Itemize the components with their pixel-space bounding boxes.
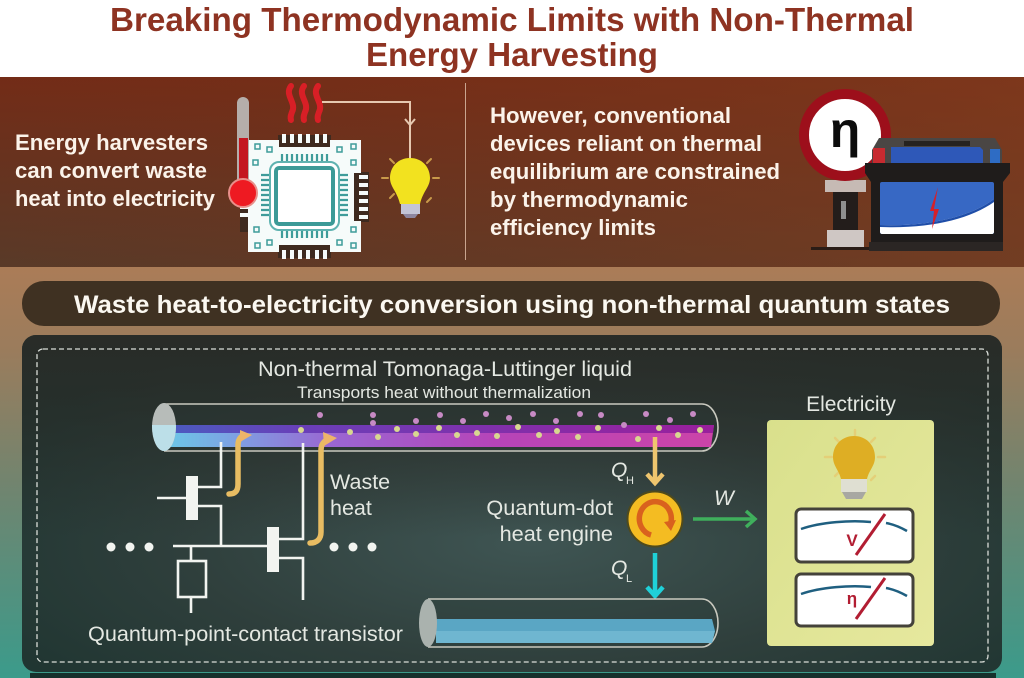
electricity output: Electricity	[806, 393, 896, 416]
text: thermodynamic limits: efficiency limits	[490, 215, 656, 240]
quantum-dot heat engine: Quantum-dot	[486, 495, 613, 520]
icon: output bulb	[825, 430, 885, 499]
text: waste heat: Waste	[330, 470, 390, 494]
text: thermodynamic limits: However, conventional	[490, 103, 731, 128]
text: thermodynamic limits: equilibrium are constrained	[490, 159, 780, 184]
arrow: QH: H	[626, 475, 634, 487]
hot liquid tube	[152, 403, 718, 451]
arrow: W	[693, 487, 755, 527]
icon: efficiency sign: η	[830, 102, 860, 158]
voltage meter	[796, 509, 913, 562]
arrow: W: W	[714, 487, 736, 510]
title	[110, 1, 914, 73]
text: thermodynamic limits: devices reliant on thermal	[490, 131, 762, 156]
icon: car battery	[865, 138, 1010, 251]
quantum-dot heat engine	[486, 492, 682, 546]
efficiency meter: η	[847, 589, 857, 608]
cold liquid tube	[419, 599, 718, 647]
voltage meter: V	[846, 531, 858, 550]
icon: efficiency sign	[804, 94, 886, 250]
panel: non-thermal quantum conversion	[22, 335, 1002, 672]
icon: heat waves	[289, 86, 320, 120]
arrow: QL: Q	[611, 557, 627, 580]
icon: light bulb	[382, 158, 439, 218]
title: Breaking Thermodynamic Limits with Non-Thermal	[110, 1, 914, 38]
icon: microchip	[240, 134, 369, 259]
text: quantum-point-contact transistor: Quantum-point-contact transistor	[88, 622, 403, 646]
panel: conventional harvesters banner	[0, 77, 1024, 267]
arrow: QL	[611, 553, 663, 596]
text: liquid heading: Non-thermal Tomonaga-Luttinger liquid	[258, 357, 632, 381]
heading pill: Waste heat-to-electricity conversion using non-thermal quantum states	[74, 291, 950, 319]
text: energy harvesters	[15, 130, 216, 211]
heading pill	[22, 281, 1000, 326]
quantum-dot heat engine: heat engine	[500, 521, 613, 546]
title: Energy Harvesting	[366, 36, 658, 73]
continuation dots	[106, 542, 376, 552]
electricity output	[767, 393, 934, 646]
particles	[317, 411, 696, 428]
text: thermodynamic limits	[490, 103, 780, 240]
text: energy harvesters: can convert waste	[15, 158, 207, 183]
text: liquid heading: Transports heat without thermalization	[297, 384, 591, 402]
arrow: heat to bulb	[322, 102, 415, 160]
text: liquid heading	[258, 357, 632, 402]
arrows: waste heat	[229, 430, 337, 543]
icon: thermometer	[229, 97, 257, 207]
bottom strip	[30, 673, 996, 678]
arrow: QL: L	[626, 573, 632, 585]
text: waste heat: heat	[330, 496, 372, 520]
text: thermodynamic limits: by thermodynamic	[490, 187, 688, 212]
quantum-point-contact transistor circuit	[157, 442, 303, 613]
text: waste heat	[330, 470, 390, 520]
arrow: QH: Q	[611, 459, 627, 482]
text: energy harvesters: Energy harvesters	[15, 130, 208, 155]
arrow: QH	[611, 437, 663, 487]
text: energy harvesters: heat into electricity	[15, 186, 216, 211]
efficiency meter	[796, 574, 913, 626]
